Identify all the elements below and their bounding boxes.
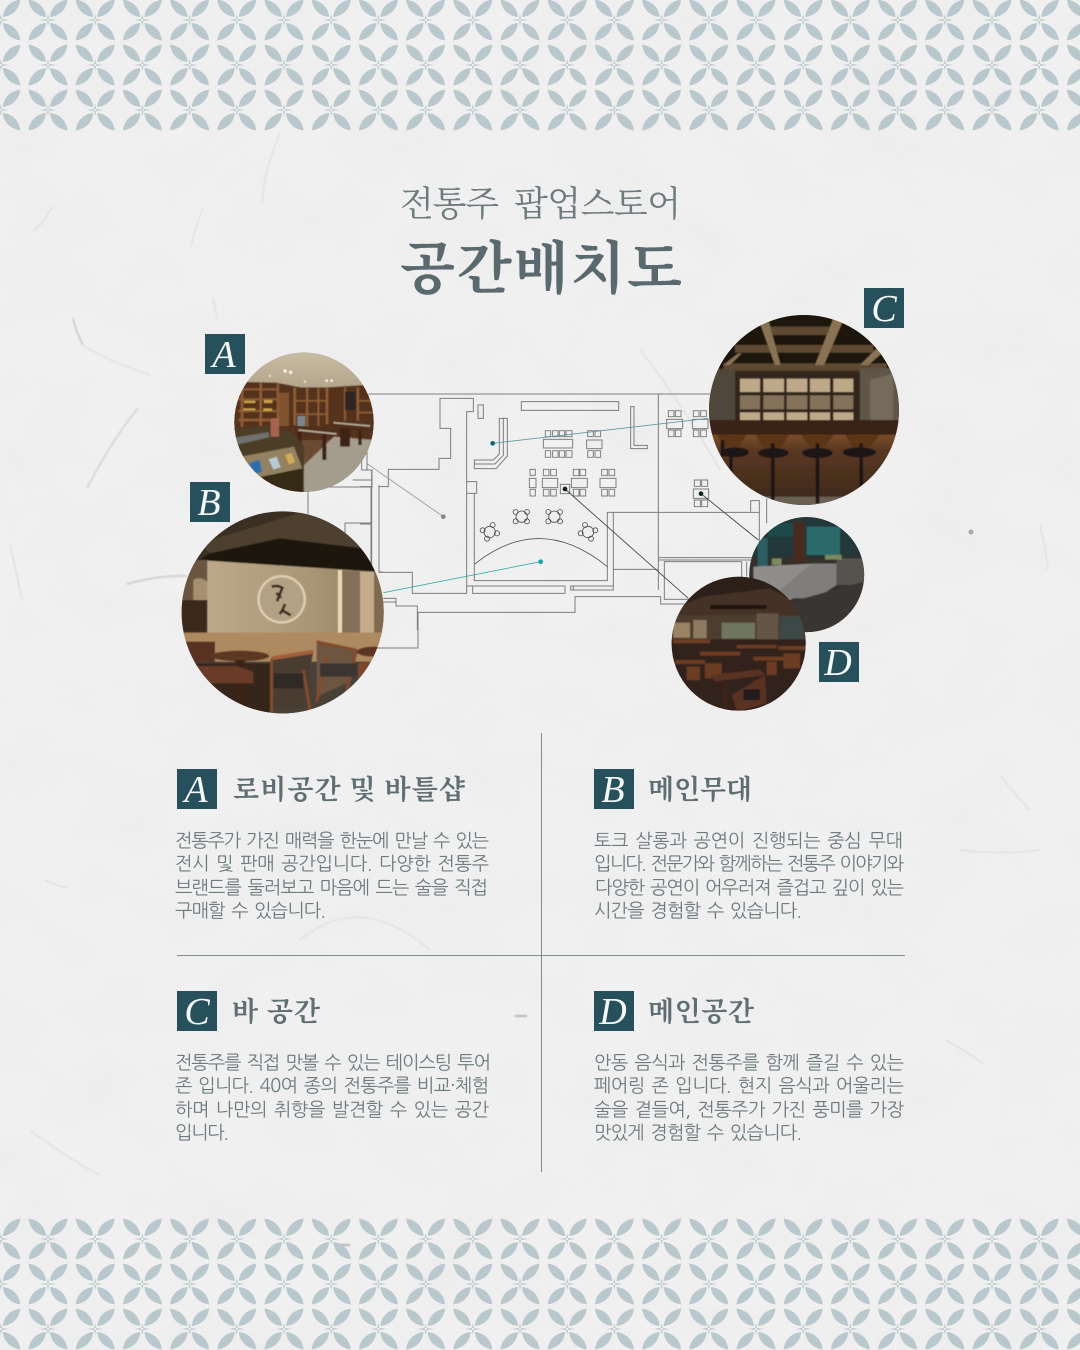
label A on plan bbox=[205, 334, 245, 376]
section D: 안동 음식과 전통주를 함께 즐길 수 있는 bbox=[594, 1053, 904, 1072]
section B: 토크 살롱과 공연이 진행되는 중심 무대 bbox=[594, 831, 903, 850]
section C bbox=[175, 991, 491, 1142]
label D on plan: D bbox=[823, 642, 852, 684]
section B: B bbox=[601, 769, 625, 811]
section B: 메인무대 bbox=[648, 775, 752, 805]
floor plan bbox=[353, 394, 767, 630]
photo C: bar bbox=[707, 313, 903, 510]
subtitle: 팝업스토어 bbox=[514, 185, 681, 224]
section D: 맛있게 경험할 수 있습니다. bbox=[594, 1123, 802, 1142]
section A: A bbox=[181, 769, 208, 811]
section A: 로비공간 및 바틀샵 bbox=[233, 775, 466, 805]
subtitle bbox=[400, 185, 681, 224]
section B bbox=[594, 769, 905, 920]
section B: 입니다. 전문가와 함께하는 전통주 이야기와 bbox=[594, 854, 905, 873]
photo B: main stage bbox=[180, 510, 390, 720]
seats and tables bbox=[529, 411, 709, 507]
top pattern band bbox=[0, 0, 1080, 133]
section C: 바 공간 bbox=[232, 997, 321, 1027]
section D: 술을 곁들여, 전통주가 가진 풍미를 가장 bbox=[594, 1100, 905, 1119]
section A: 브랜드를 둘러보고 마음에 드는 술을 직접 bbox=[175, 878, 488, 897]
section D: 페어링 존 입니다. 현지 음식과 어울리는 bbox=[594, 1076, 904, 1095]
photo A: lobby and bottle shop bbox=[234, 352, 374, 492]
label C on plan: C bbox=[871, 288, 897, 330]
leader lines bbox=[367, 418, 758, 598]
section D: D bbox=[598, 991, 627, 1033]
section C: 전통주를 직접 맛볼 수 있는 테이스팅 투어 bbox=[175, 1053, 491, 1072]
section A: 전통주가 가진 매력을 한눈에 만날 수 있는 bbox=[175, 831, 489, 850]
label D on plan bbox=[819, 642, 859, 684]
label C on plan bbox=[864, 288, 904, 330]
section C: 존 입니다. 40여 종의 전통주를 비교·체험 bbox=[175, 1076, 489, 1095]
title: 공간배치도 bbox=[400, 238, 682, 301]
section A: 구매할 수 있습니다. bbox=[175, 901, 326, 920]
label A on plan: A bbox=[209, 334, 236, 376]
label B on plan bbox=[190, 482, 230, 524]
section C: 입니다. bbox=[175, 1123, 229, 1142]
section A bbox=[175, 769, 489, 920]
section D bbox=[594, 991, 905, 1142]
section B: 다양한 공연이 어우러져 즐겁고 깊이 있는 bbox=[595, 878, 904, 897]
subtitle: 전통주 bbox=[400, 185, 499, 224]
section D: 메인공간 bbox=[648, 997, 755, 1027]
bottom pattern band bbox=[0, 1217, 1080, 1350]
section A: 전시 및 판매 공간입니다. 다양한 전통주 bbox=[175, 854, 489, 873]
section B: 시간을 경험할 수 있습니다. bbox=[594, 901, 802, 920]
section C: C bbox=[184, 991, 210, 1033]
label B on plan: B bbox=[197, 482, 221, 524]
photo D: dining hall bbox=[670, 575, 808, 714]
photo E: tiled counter bbox=[747, 515, 867, 637]
lower floor plan lines bbox=[308, 452, 418, 648]
section C: 하며 나만의 취향을 발견할 수 있는 공간 bbox=[175, 1100, 490, 1119]
